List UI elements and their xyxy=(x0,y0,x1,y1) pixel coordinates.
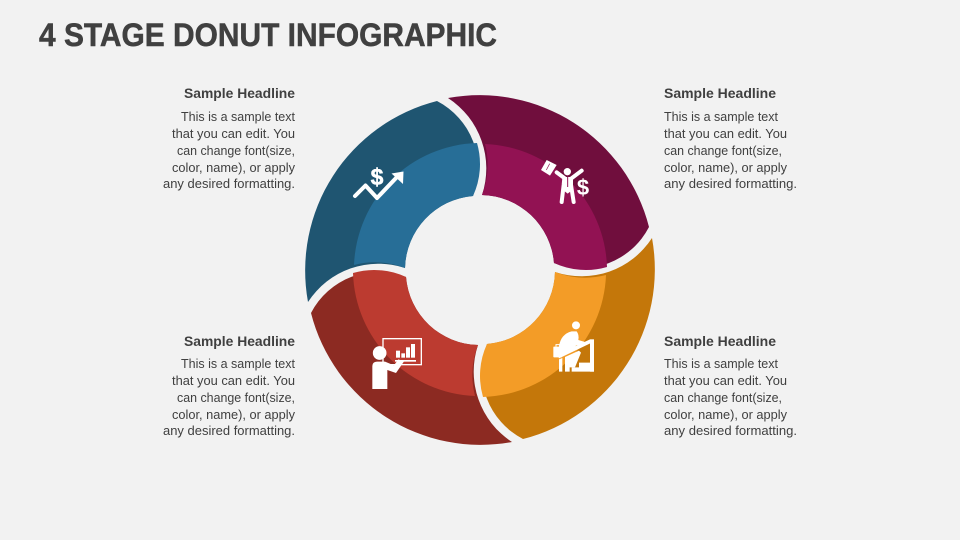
text block: top right: that you can edit. You xyxy=(664,126,787,141)
text block: top right: any desired formatting. xyxy=(664,176,797,191)
icon: celebrating businessman xyxy=(541,160,589,202)
text block: bottom right: can change font(size, xyxy=(664,390,782,405)
segment: red xyxy=(311,270,512,445)
text block: top right: can change font(size, xyxy=(664,143,782,158)
segment: magenta xyxy=(448,95,649,270)
icon: person climbing stairs xyxy=(553,321,594,372)
text block: top right: color, name), or apply xyxy=(664,160,787,175)
text block: bottom left: that you can edit. You xyxy=(172,373,295,388)
text block: top left: color, name), or apply xyxy=(172,160,295,175)
title: 4 STAGE DONUT INFOGRAPHIC xyxy=(39,17,497,53)
text block: bottom right xyxy=(664,333,797,438)
text block: top left: that you can edit. You xyxy=(172,126,295,141)
text block: bottom left: color, name), or apply xyxy=(172,407,295,422)
text block: bottom right: any desired formatting. xyxy=(664,423,797,438)
text block: top right: Sample Headline xyxy=(664,85,776,101)
text block: bottom right: that you can edit. You xyxy=(664,373,787,388)
text block: top left: any desired formatting. xyxy=(163,176,295,191)
text block: bottom right: This is a sample text xyxy=(664,356,778,371)
text block: bottom left: This is a sample text xyxy=(181,356,295,371)
text block: top left: Sample Headline xyxy=(184,85,295,101)
text block: top right xyxy=(664,85,797,191)
segment: blue xyxy=(305,101,480,302)
text block: bottom right: Sample Headline xyxy=(664,333,776,349)
icon: presenter with chart board xyxy=(372,339,421,389)
text block: top left xyxy=(163,85,295,191)
text block: bottom left xyxy=(163,333,295,438)
text block: bottom right: color, name), or apply xyxy=(664,407,787,422)
icon: growth arrow with dollar xyxy=(355,164,404,198)
text block: bottom left: can change font(size, xyxy=(177,390,295,405)
text block: bottom left: any desired formatting. xyxy=(163,423,295,438)
icon: growth arrow with dollar: $ xyxy=(371,164,384,190)
donut chart xyxy=(305,95,655,445)
text block: top left: This is a sample text xyxy=(181,109,295,124)
segment: orange xyxy=(480,238,655,439)
text block: top right: This is a sample text xyxy=(664,109,778,124)
icon: celebrating businessman: $ xyxy=(577,175,589,200)
text block: bottom left: Sample Headline xyxy=(184,333,295,349)
text block: top left: can change font(size, xyxy=(177,143,295,158)
